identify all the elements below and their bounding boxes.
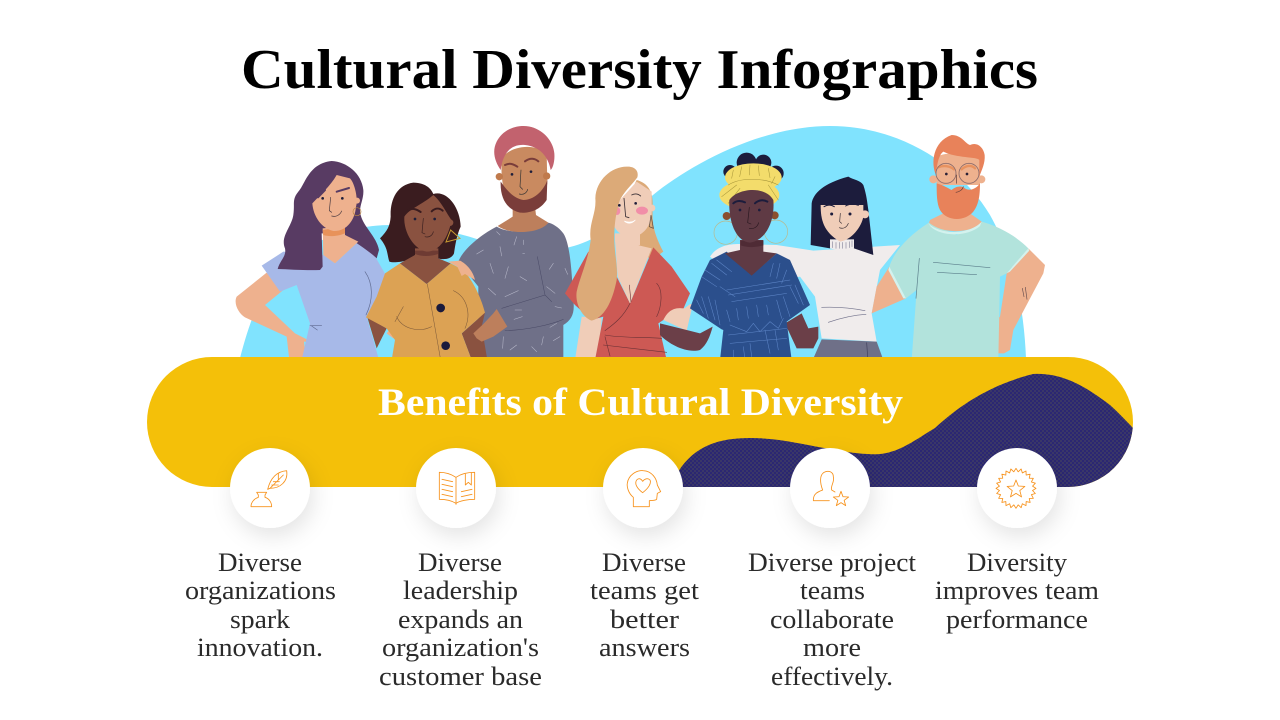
- text block: benefit 1: organizations: [185, 576, 336, 605]
- text block: benefit 3: [590, 548, 700, 662]
- person: woman in white top: [710, 177, 900, 360]
- icon circle: person with star: [790, 448, 870, 528]
- text block: benefit 4: effectively.: [771, 662, 893, 691]
- text block: benefit 2: organization's: [382, 633, 539, 662]
- text block: benefit 4: [748, 548, 917, 691]
- text block: benefit 4: teams: [800, 576, 865, 605]
- text block: benefit 4: Diverse project: [748, 548, 917, 577]
- text block: benefit 2: leadership: [403, 576, 518, 605]
- text block: benefit 1: Diverse: [218, 548, 302, 577]
- text block: benefit 3: Diverse: [602, 548, 686, 577]
- icon circle: inkwell and feather: [230, 448, 310, 528]
- icon circle: badge with star: [977, 448, 1057, 528]
- blue background blob: [240, 126, 1026, 358]
- icon circle: open book: [416, 448, 496, 528]
- hand of grey shirt man: [473, 309, 507, 342]
- person: woman in blue patterned dress: [660, 153, 818, 360]
- banner: yellow pill with dotted wave: [147, 357, 1135, 490]
- person: red-haired man with glasses and beard: [872, 135, 1045, 360]
- text block: benefit 1: [185, 548, 336, 662]
- text block: benefit 5: improves team: [935, 576, 1099, 605]
- text block: benefit 3: teams get: [590, 576, 700, 605]
- title: Cultural Diversity Infographics: [241, 39, 1038, 101]
- illustration: group of diverse people: [236, 126, 1045, 360]
- text block: benefit 2: customer base: [379, 662, 542, 691]
- text block: benefit 3: better: [610, 605, 679, 634]
- text block: benefit 4: collaborate: [770, 605, 894, 634]
- banner heading: Benefits of Cultural Diversity: [378, 381, 904, 424]
- text block: benefit 2: Diverse: [418, 548, 502, 577]
- text block: benefit 5: [935, 548, 1099, 634]
- text block: benefit 2: [379, 548, 542, 691]
- hand on shoulder: [448, 261, 475, 280]
- person: woman with dark hair and yellow dress: [366, 183, 507, 360]
- person: woman with purple hair: [236, 161, 387, 360]
- text block: benefit 4: more: [803, 633, 861, 662]
- text block: benefit 3: answers: [599, 633, 690, 662]
- text block: benefit 2: expands an: [398, 605, 523, 634]
- text block: benefit 1: innovation.: [197, 633, 323, 662]
- text block: benefit 1: spark: [230, 605, 290, 634]
- person: man in grey shirt with turban: [458, 126, 574, 360]
- text block: benefit 5: Diversity: [967, 548, 1067, 577]
- icon circle: head with heart: [603, 448, 683, 528]
- dotted navy wave: [678, 374, 1135, 490]
- person: blonde woman in red dress: [565, 167, 693, 360]
- text block: benefit 5: performance: [946, 605, 1088, 634]
